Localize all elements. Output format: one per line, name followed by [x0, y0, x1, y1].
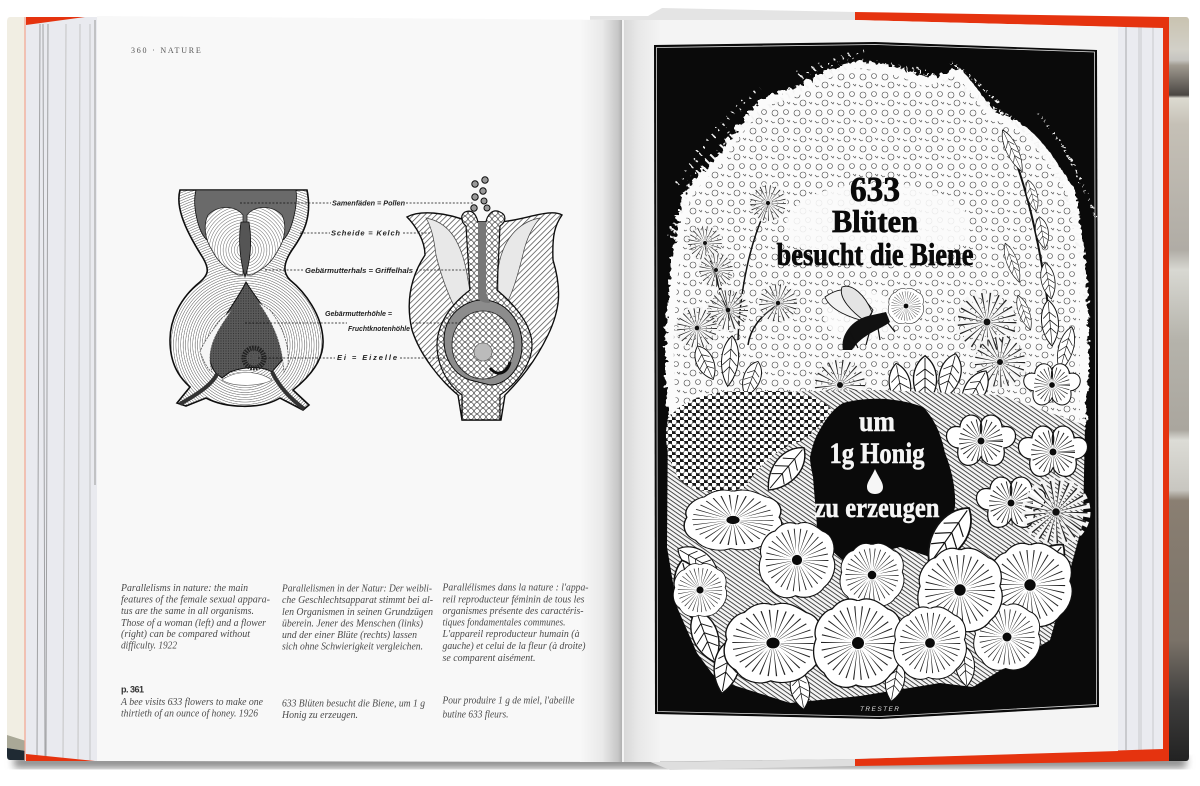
- caption p. 361 French: Pour produire 1 g de miel, l'abeille: [442, 696, 575, 706]
- captions: [120, 582, 588, 721]
- subline: um 1 g Honig zu erzeugen: [814, 405, 940, 524]
- wreath backdrop: [667, 390, 1085, 703]
- central black clearing: [810, 399, 955, 563]
- petunia blooms: [673, 490, 1072, 687]
- petunia wreath: [668, 364, 1088, 711]
- subline: um 1 g Honig zu erzeugen: zu erzeugen: [814, 493, 940, 524]
- labels: Ei = Eizelle: [337, 353, 397, 362]
- spine headband top and bottom: [590, 8, 855, 770]
- caption p. 361 English: A bee visits 633 flowers to make one: [120, 697, 264, 708]
- subline: um 1 g Honig zu erzeugen: um: [859, 405, 895, 438]
- right cover edge: [1169, 17, 1189, 761]
- red cover corners left: [26, 17, 95, 761]
- caption German: che Geschlechtsapparat stimmt bei al-: [282, 595, 433, 606]
- upper middle flowers: [826, 305, 1014, 416]
- wildflowers on left: [686, 193, 789, 399]
- subline: um 1 g Honig zu erzeugen: 1g Honig: [830, 437, 924, 470]
- left page: [97, 16, 625, 762]
- caption French: se comparent aisément.: [442, 653, 536, 664]
- caption English: (right) can be compared without: [121, 629, 250, 640]
- caption p. 361 German: Honig zu erzeugen.: [281, 710, 358, 721]
- caption p. 361 German: [281, 698, 425, 721]
- caption English: tus are the same in all organisms.: [121, 606, 254, 617]
- right page block: [1118, 27, 1164, 751]
- caption p. 361 English: thirtieth of an ounce of honey. 1926: [121, 708, 258, 720]
- caption French: reil reproducteur féminin de tous les: [442, 594, 585, 606]
- caption French: gauche) et celui de la fleur (à droite): [442, 641, 586, 652]
- labels: Gebärmutterhals = Griffelhals: [305, 266, 413, 275]
- caption German: Parallelismen in der Natur: Der weibli-: [281, 584, 432, 594]
- caption English: Parallelisms in nature: the main: [120, 583, 248, 594]
- caption French: tiques fondamentales communes.: [442, 618, 566, 628]
- left cover edge: [7, 17, 26, 760]
- icon: bee: [825, 286, 895, 350]
- pansies: [946, 364, 1088, 530]
- caption German: und der einer Blüte (rechts) lassen: [282, 630, 417, 641]
- blossom cloud: [666, 50, 1094, 430]
- headline: 633 Blüten besucht die Biene: 633: [850, 170, 900, 209]
- signature: TRESTER: [860, 706, 900, 713]
- caption p. 361 French: butine 633 fleurs.: [442, 710, 508, 720]
- caption English: difficulty. 1922: [121, 640, 177, 652]
- caption p. 361 English: [120, 697, 264, 720]
- caption English: features of the female sexual appara-: [121, 594, 270, 606]
- caption French: L'appareil reproducteur humain (à: [442, 629, 580, 640]
- figure: flower cross-section: [407, 211, 562, 420]
- caption p. 361 French: [442, 696, 575, 720]
- pollen grains: [471, 177, 490, 211]
- page reference: p. 361: [121, 684, 144, 694]
- labels: Samenfäden = Pollen: [332, 198, 405, 208]
- caption French: [442, 582, 588, 664]
- labels: Gebärmutterhöhle =: [325, 309, 393, 318]
- headline: 633 Blüten besucht die Biene: besucht die Biene: [776, 236, 974, 272]
- caption German: len Organismen in seinen Grundzügen: [282, 607, 433, 618]
- caption German: [281, 584, 433, 652]
- leaves: [668, 440, 1075, 711]
- icon: honey drop: [867, 469, 883, 494]
- right page: [622, 20, 1118, 762]
- caption German: sich ohne Schwierigkeit vergleichen.: [282, 642, 423, 652]
- labels: Fruchtknotenhöhle: [348, 324, 410, 333]
- figure: female organ cross-section: [170, 190, 323, 410]
- foxglove stalk: [997, 128, 1079, 373]
- hydrangea clusters: [666, 391, 832, 492]
- caption French: organismes présente des caractéris-: [442, 606, 584, 617]
- pointer lines: [240, 203, 473, 358]
- caption German: überein. Jener des Menschen (links): [282, 618, 424, 630]
- lily beside bee: [888, 288, 924, 324]
- illustration: anatomical comparison: [170, 177, 562, 420]
- poster: 633 Blüten: [654, 42, 1099, 719]
- caption p. 361 German: 633 Blüten besucht die Biene, um 1 g: [282, 698, 425, 710]
- headline: 633 Blüten besucht die Biene: [776, 170, 974, 272]
- caption English: [120, 583, 270, 652]
- caption English: Those of a woman (left) and a flower: [121, 618, 266, 629]
- labels: [305, 198, 413, 362]
- poster black panel: [654, 42, 1099, 719]
- headline: 633 Blüten besucht die Biene: Blüten: [832, 203, 918, 239]
- red cover right: [855, 12, 1169, 766]
- running head: 360 · NATURE: [131, 46, 202, 55]
- caption French: Parallélismes dans la nature : l'appa-: [442, 582, 588, 594]
- left page block: [25, 17, 98, 761]
- labels: Scheide = Kelch: [331, 228, 400, 238]
